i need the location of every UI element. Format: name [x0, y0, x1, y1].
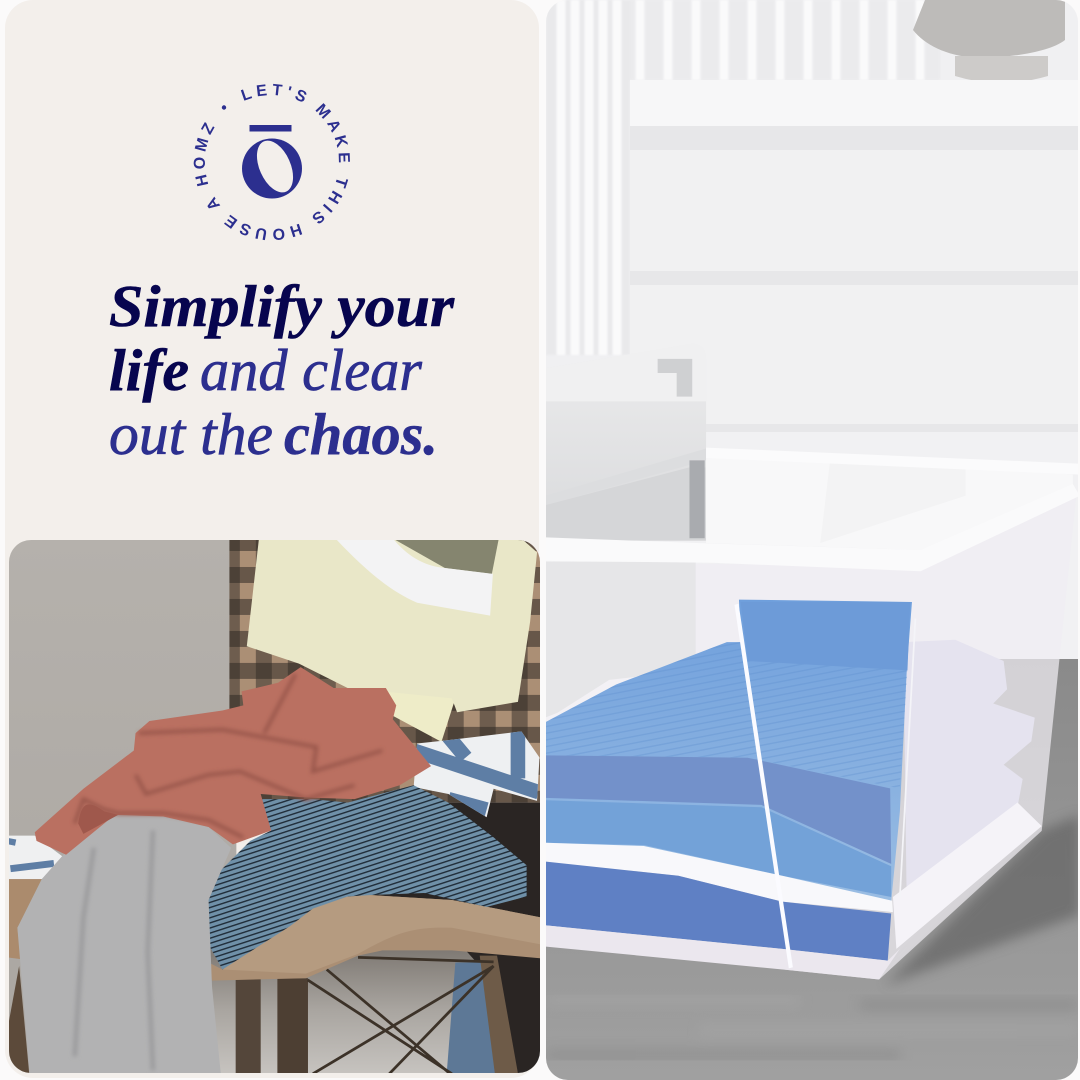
logo badge [194, 84, 350, 240]
box base [545, 925, 900, 980]
heading line 3 bold: chaos. [284, 401, 438, 467]
back rim [706, 448, 1080, 475]
box inner back wall [706, 458, 707, 540]
logo: circular slogan text: LET'S MAKE THIS HOUSE A HOMZ [194, 84, 350, 240]
wall background [546, 2, 1078, 562]
clear vertical seam [900, 618, 915, 897]
white sheet layer [545, 843, 893, 912]
blue sweater stack [545, 600, 912, 902]
skirting and back wall [706, 432, 1078, 460]
slatted wall panels [546, 0, 940, 355]
white collar [335, 538, 493, 616]
photo: messy clothes on chair [7, 538, 542, 1077]
cream under layer [388, 692, 454, 741]
clear corner edge [737, 604, 791, 968]
lower drawer [630, 285, 1080, 424]
panel: left cream card [5, 0, 539, 1078]
heading [109, 273, 455, 467]
olive collar [393, 538, 499, 574]
box body tint [546, 659, 1060, 980]
left box interior [545, 562, 696, 718]
logo: separator dot [222, 105, 226, 110]
logo: macron bar [250, 125, 292, 132]
dresser top [630, 80, 1032, 126]
grey sweatpants [17, 815, 231, 1073]
floor shadow [885, 815, 1080, 985]
heading line 3 light: out the [109, 401, 273, 467]
heading line 1: Simplify your [109, 273, 455, 339]
blue jeans under chair [447, 963, 497, 1074]
navy striped sweater [205, 785, 527, 970]
chair legs [7, 956, 519, 1077]
wall [7, 538, 236, 1077]
lilac folded garments right [904, 640, 1035, 886]
cream shirt [247, 538, 537, 712]
plaid shirt hanging on chair back [229, 538, 542, 803]
logo: letter o ring [242, 135, 302, 198]
stacked lid behind [545, 344, 706, 541]
floor [546, 659, 1080, 1080]
seat left edge [9, 879, 42, 959]
vase on dresser [913, 0, 1065, 83]
lower blue layer [545, 862, 891, 961]
heading line 2 bold: life [109, 337, 189, 403]
inner panel reflections [820, 456, 966, 543]
salmon sweater [35, 667, 431, 855]
heading line 2 light: and clear [200, 337, 423, 403]
striped towel right [414, 730, 539, 817]
white garment right [893, 803, 1042, 949]
chair seat [209, 895, 541, 981]
dark area behind chair right [348, 803, 542, 1077]
floor streaks [546, 1000, 1078, 1055]
striped towel left [7, 836, 63, 879]
photo: clear storage box with folded sweaters [545, 0, 1080, 1080]
under-chair background [210, 948, 474, 1073]
upper drawer [630, 150, 1080, 271]
dresser body [630, 126, 1080, 460]
box rim [545, 484, 1080, 571]
